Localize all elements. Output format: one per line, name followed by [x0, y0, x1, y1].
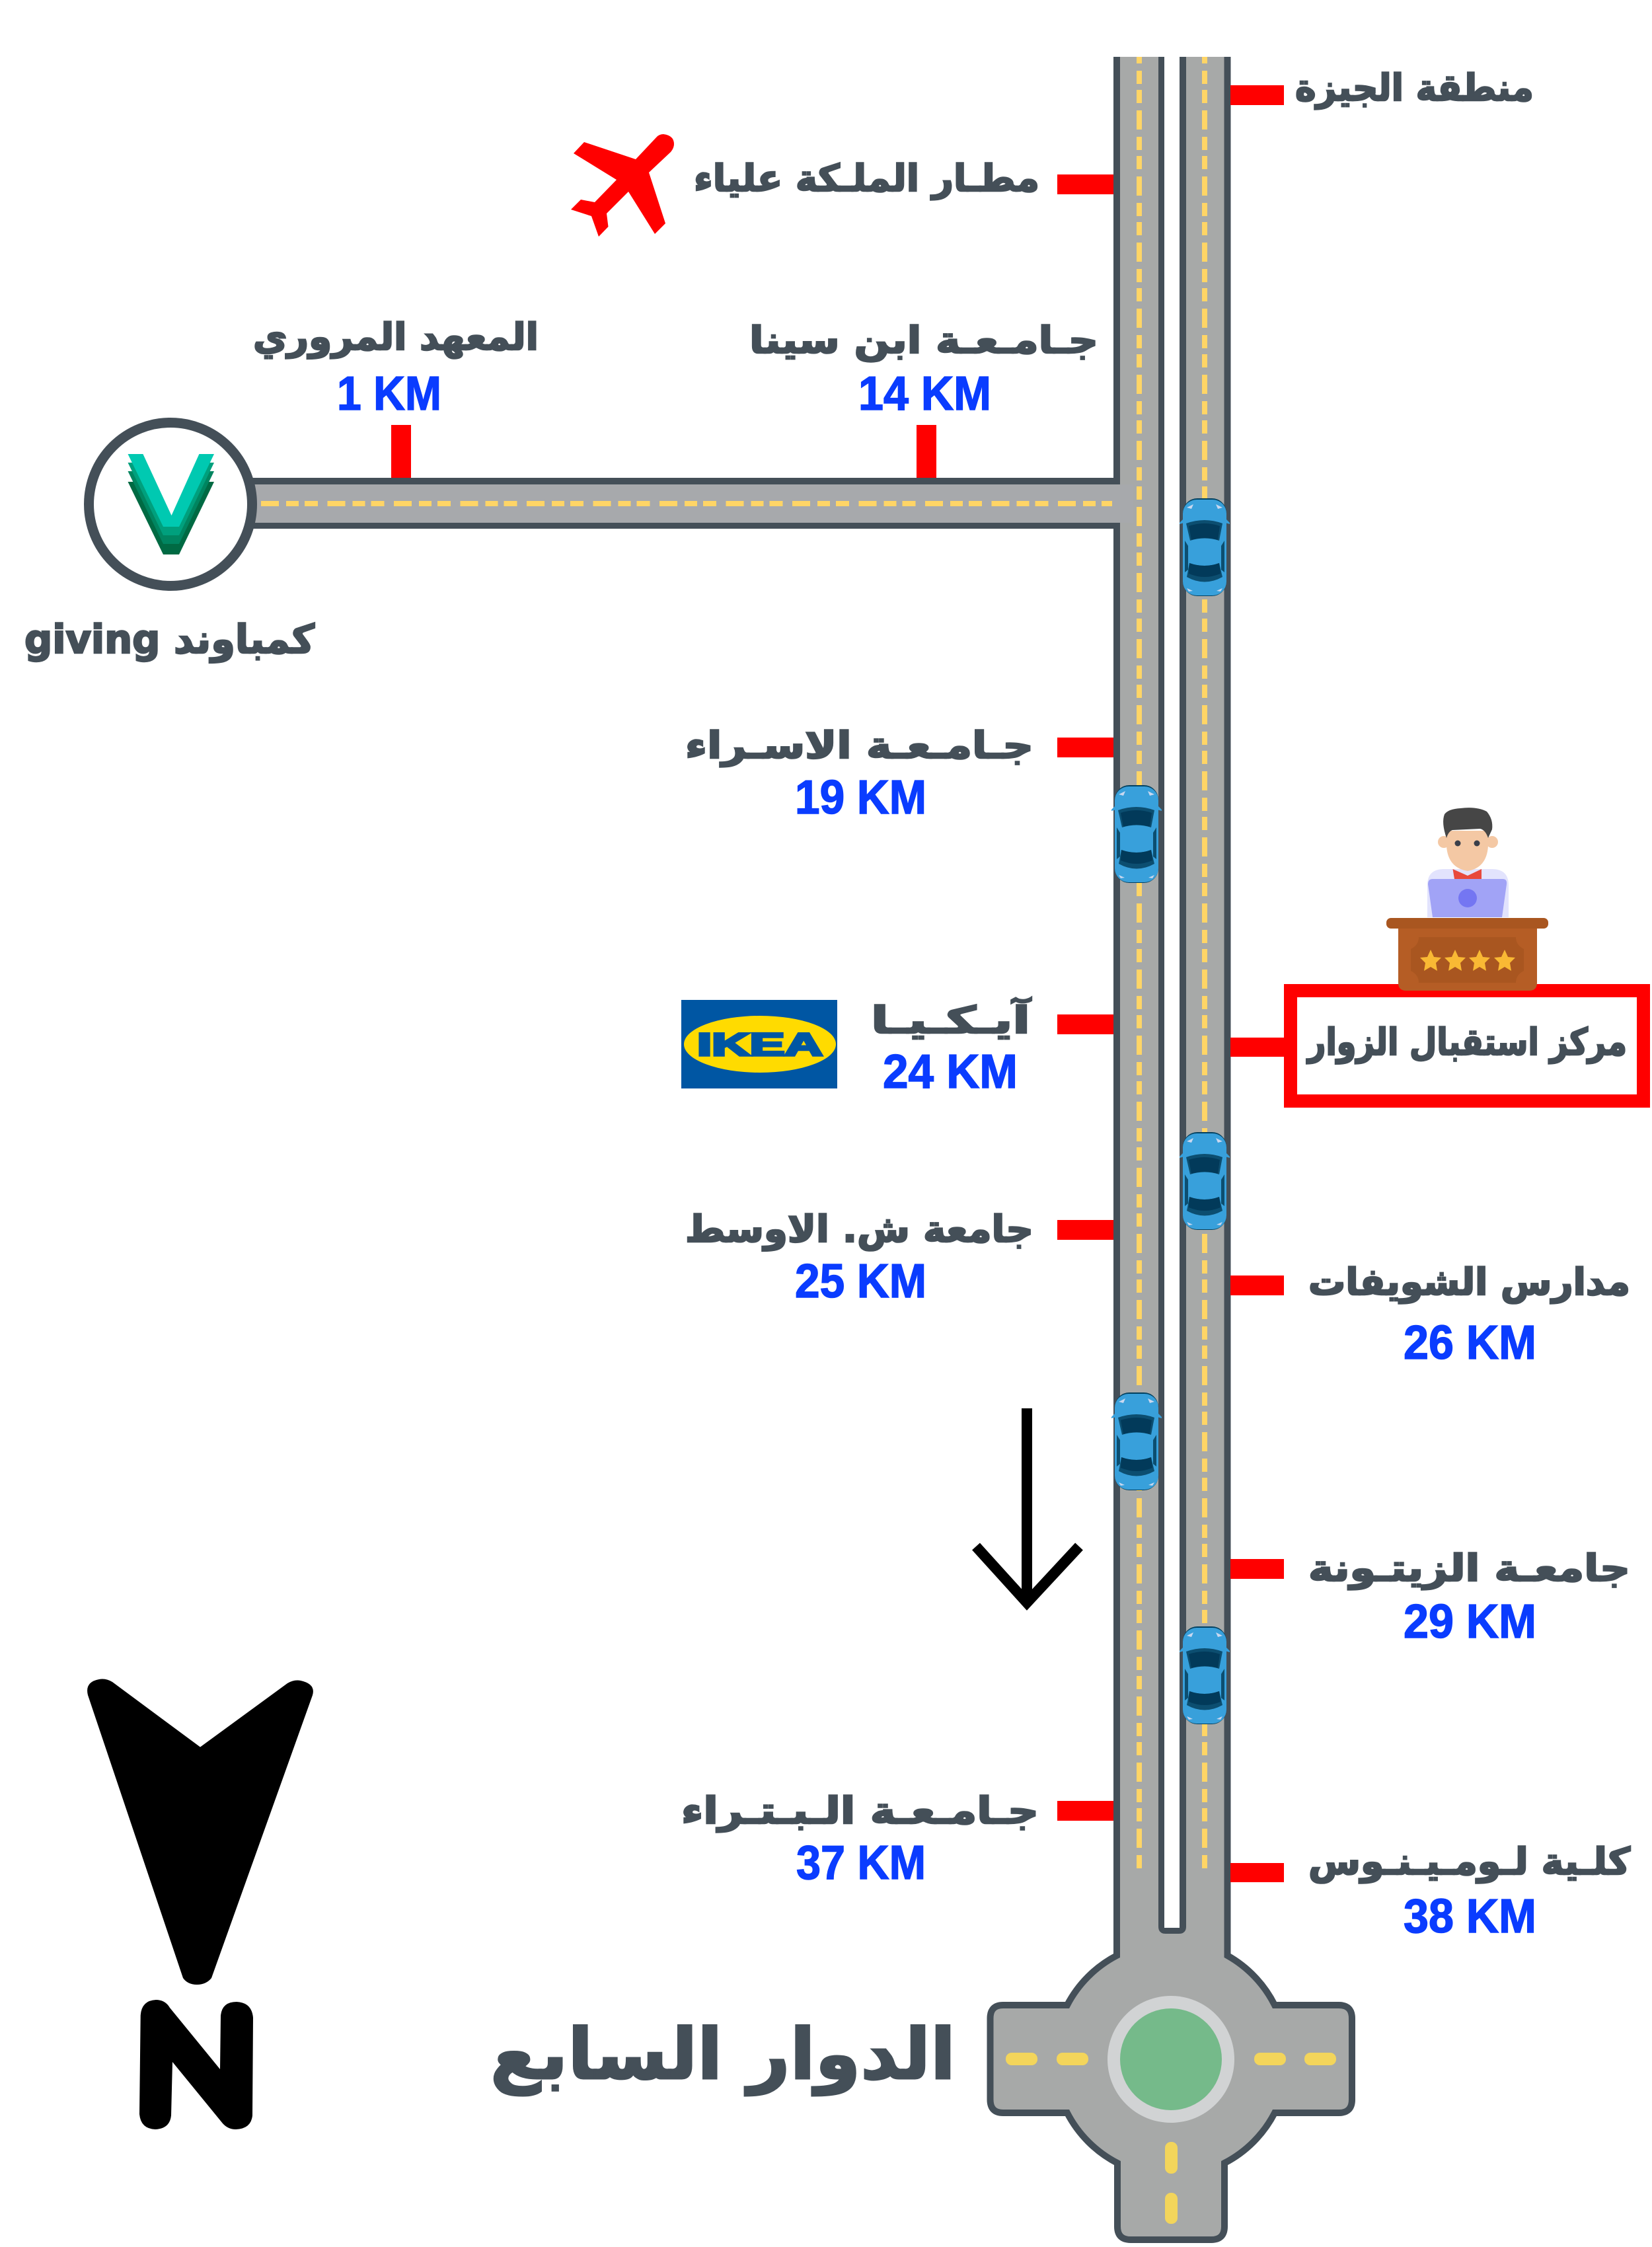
red location ticks	[391, 85, 1284, 1882]
label: luminus college: كلـية لـومـيـنـوس	[1308, 1841, 1630, 1884]
label: petra university: جـامـعـة الـبـتـراء	[681, 1790, 1039, 1833]
label: ibn sina university: 14 KM	[858, 367, 991, 420]
label: isra university: جـامـعـة الاسـراء	[685, 724, 1033, 767]
label: choueifat schools	[1308, 1261, 1630, 1369]
roundabout and vertical road	[990, 57, 1352, 2240]
compound logo circle	[89, 423, 252, 586]
label: ibn sina university: جـامـعـة ابن سينا	[749, 319, 1098, 362]
label: choueifat schools: مدارس الشويفات	[1308, 1261, 1630, 1304]
car 5	[1180, 1626, 1230, 1724]
label: zaytoonah university	[1308, 1547, 1630, 1648]
label: ibn sina university	[749, 319, 1098, 420]
label: traffic institute: 1 KM	[337, 367, 441, 420]
car 4	[1111, 1392, 1162, 1490]
icon: reception desk with receptionist	[1386, 808, 1548, 991]
label: middle east university: جامعة ش. الاوسط	[685, 1208, 1033, 1251]
label: petra university	[681, 1790, 1039, 1889]
label: middle east university	[685, 1208, 1033, 1308]
label: isra university: 19 KM	[795, 771, 926, 824]
label: isra university	[685, 724, 1033, 824]
label: traffic institute	[253, 316, 539, 420]
heading: seventh circle: الدوار السابع	[490, 2014, 956, 2096]
roundabout lane marks	[1006, 2053, 1336, 2224]
label: zaytoonah university: 29 KM	[1404, 1595, 1536, 1648]
car 2	[1111, 785, 1162, 883]
horizontal road	[251, 478, 1123, 529]
callout: visitor center box	[1291, 991, 1643, 1101]
compound name: giving كمباوند	[24, 617, 315, 663]
icon: ikea logo	[681, 1000, 837, 1088]
icon: north arrow	[87, 1679, 313, 1985]
arrow: direction of travel	[976, 1408, 1079, 1603]
road dashes	[261, 57, 1205, 1869]
icon: north letter N	[139, 2000, 253, 2129]
label: ikea	[871, 997, 1032, 1098]
icon: airplane	[571, 134, 674, 237]
car 3	[1180, 1132, 1230, 1230]
label: choueifat schools: 26 KM	[1404, 1316, 1536, 1369]
label: giza: منطقة الجيزة	[1295, 67, 1534, 110]
label: zaytoonah university: جامعـة الزيتـونة	[1308, 1547, 1630, 1590]
label: ikea: 24 KM	[883, 1046, 1018, 1098]
label: luminus college: 38 KM	[1404, 1890, 1536, 1943]
icon: ikea logo: IKEA	[697, 1028, 823, 1063]
label: airport: مطـار الملـكة علياء	[694, 157, 1039, 200]
label: middle east university: 25 KM	[795, 1255, 926, 1308]
label: petra university: 37 KM	[796, 1837, 926, 1889]
label: luminus college	[1308, 1841, 1630, 1943]
label: traffic institute: المعهد المروري	[253, 316, 539, 359]
car 1	[1180, 498, 1230, 596]
label: ikea: آيـكـيـا	[871, 997, 1032, 1042]
